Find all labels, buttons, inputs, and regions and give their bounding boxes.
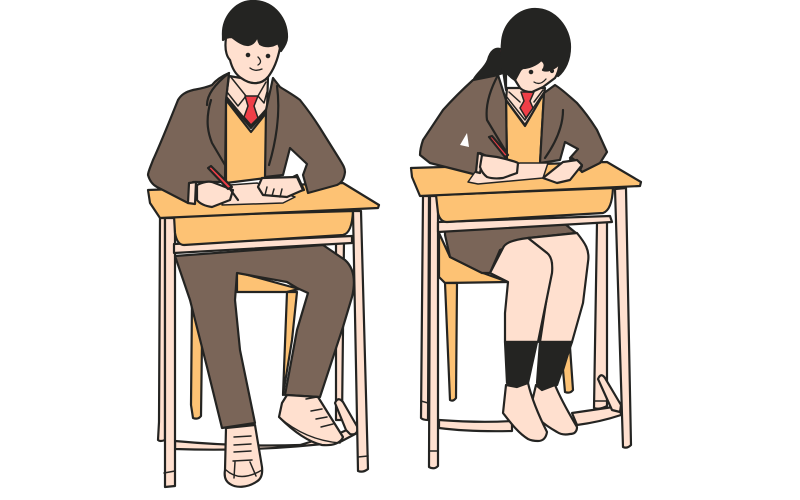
girl face <box>515 58 560 92</box>
girl chair <box>439 233 573 401</box>
boy collar lines <box>227 76 267 106</box>
girl socks <box>505 342 572 390</box>
girl shoes <box>503 383 577 441</box>
girl desk drawer <box>436 188 613 222</box>
boy tie <box>244 96 258 125</box>
girl desk rail <box>438 216 612 232</box>
girl desk rear legs and stretcher <box>421 196 621 431</box>
girl right hand and cuff <box>543 158 582 183</box>
boy shirt <box>226 76 268 128</box>
girl pen <box>489 136 508 157</box>
boy shoe front <box>225 425 262 487</box>
girl shirt <box>506 88 545 125</box>
girl at desk <box>411 9 641 468</box>
boy desk rail <box>174 236 352 253</box>
girl collar lines <box>509 90 543 102</box>
girl vest trim <box>506 92 544 120</box>
boy front desk legs <box>164 211 368 487</box>
boy hair <box>223 1 287 51</box>
girl skirt <box>445 224 576 273</box>
boy pen <box>208 166 238 200</box>
girl jacket gap <box>460 133 469 147</box>
girl left leg <box>490 238 552 342</box>
girl jacket <box>420 75 607 175</box>
girl hair tie <box>500 47 506 63</box>
boy desk rear legs and stretcher <box>158 218 359 450</box>
boy right hand and cuff <box>258 175 304 197</box>
girl ponytail <box>474 49 503 79</box>
boy at desk <box>148 1 379 487</box>
boy trousers <box>175 245 354 428</box>
girl vest <box>506 93 544 164</box>
girl left hand and cuff <box>476 153 518 178</box>
boy desk drawer <box>174 211 353 245</box>
boy desk top <box>148 183 379 218</box>
girl hair <box>502 9 570 90</box>
boy vest trim <box>226 96 267 126</box>
boy paper <box>222 183 295 205</box>
girl tie <box>520 92 534 118</box>
girl paper <box>468 163 548 184</box>
boy eyes and smile <box>246 53 270 70</box>
boy neck and face <box>225 28 280 83</box>
girl desk top <box>411 162 641 196</box>
boy shoe side <box>279 395 343 445</box>
girl front desk legs <box>421 188 631 468</box>
girl right leg <box>528 233 588 342</box>
boy vest <box>226 100 267 183</box>
girl eye and smile <box>529 69 554 83</box>
boy chair <box>191 272 299 419</box>
boy jacket <box>148 73 345 203</box>
boy left hand and cuff <box>188 182 233 207</box>
